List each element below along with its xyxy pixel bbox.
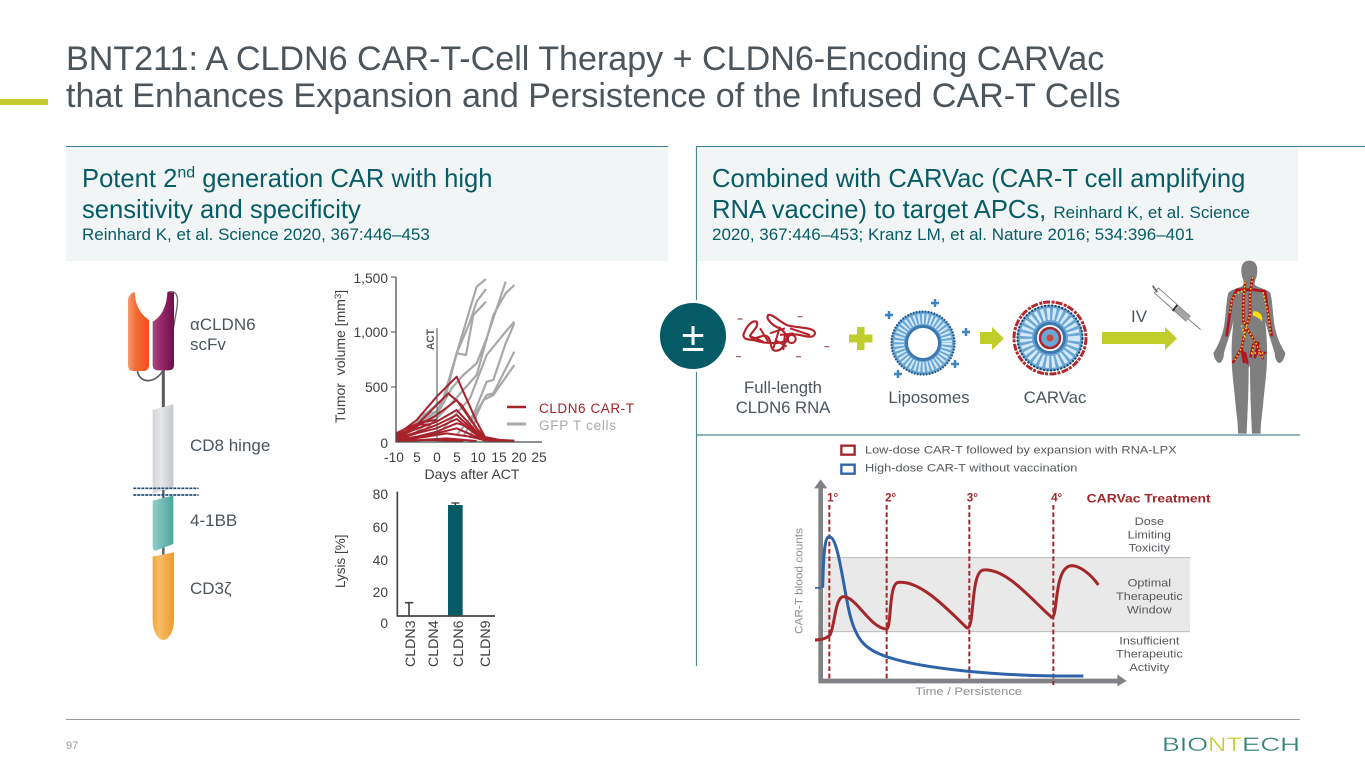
x tick labels: 5	[453, 450, 461, 465]
heading text: CARVac: Combined with CARVac (CAR-T cell amplifying	[712, 165, 1245, 193]
panel: right heading	[696, 146, 1298, 261]
bars and axes	[397, 492, 495, 616]
treatment labels	[827, 492, 1211, 505]
category labels: CLDN3	[403, 620, 419, 667]
heading text: CARVac: 2020, 367:446–453; Kranz LM, et al. Nature 2016; 534:396–401	[712, 225, 1194, 244]
title: that Enhances Expansion and Persistence of the Infused CAR-T Cells	[66, 76, 1120, 114]
header rule extension	[1298, 146, 1365, 147]
title	[66, 40, 1120, 114]
CAR labels: CD8 hinge	[190, 436, 270, 455]
blue curve	[823, 537, 1083, 676]
zone labels: Optimal	[1128, 576, 1171, 589]
zone labels: Toxicity	[1129, 541, 1170, 554]
curves: GFP and CAR-T	[396, 279, 514, 442]
legend text: Low-dose CAR-T followed by expansion with RNA-LPX	[865, 444, 1177, 456]
zone labels: Limiting	[1128, 528, 1171, 541]
logo: BioNTech: BIO	[1162, 735, 1208, 756]
x tick labels: 5	[413, 450, 421, 465]
CAR labels: 4-1BB	[190, 511, 237, 530]
zone labels: Therapeutic	[1116, 590, 1183, 603]
y axis title: Lysis [%]	[333, 534, 348, 588]
y tick labels: 1,500	[353, 271, 388, 286]
label: RNA	[736, 378, 831, 417]
icon: CARVac particle	[1014, 302, 1086, 374]
icon: liposome	[885, 299, 970, 378]
heading text: CARVac: RNA vaccine) to target APCs, Reinhard K, et al. Science	[712, 196, 1250, 224]
page number: 97	[66, 740, 78, 752]
legend text	[865, 444, 1177, 475]
x axis title: Time / Persistence	[915, 686, 1022, 698]
treatment markers	[829, 505, 1053, 685]
icon: human body	[1213, 261, 1285, 434]
optimal window band	[823, 558, 1190, 632]
logo: BioNTech	[1162, 735, 1300, 756]
y tick labels: 0	[380, 616, 388, 631]
category labels: CLDN9	[478, 620, 494, 667]
CAR labels	[190, 315, 270, 598]
heading text: potent CAR: Reinhard K, et al. Science 2020, 367:446–453	[82, 225, 430, 244]
y tick labels: 60	[373, 520, 388, 535]
icon: lime plus	[849, 327, 872, 350]
logo: BioNTech: NT	[1208, 735, 1243, 756]
legend: CLDN6 CAR-T	[539, 401, 634, 416]
chart axes	[391, 277, 542, 442]
x tick labels: 20	[511, 450, 527, 465]
y tick labels: 40	[373, 553, 388, 568]
y tick labels: 0	[380, 436, 388, 451]
y tick labels: 500	[365, 380, 388, 395]
x tick labels: 15	[491, 450, 507, 465]
panel: left heading	[66, 146, 668, 261]
CAR labels: scFv	[190, 335, 226, 354]
zone labels: Therapeutic	[1116, 647, 1183, 660]
footer rule	[66, 718, 1300, 720]
arrow: to CARVac	[980, 327, 1004, 350]
label: RNA: CLDN6 RNA	[736, 398, 831, 417]
y tick labels	[373, 487, 388, 631]
legend: GFP T cells	[539, 418, 616, 433]
heading text: CARVac	[712, 165, 1250, 244]
treatment labels: CARVac Treatment	[1087, 492, 1211, 505]
icon: syringe	[1153, 286, 1201, 330]
zone labels: Activity	[1129, 661, 1169, 674]
y tick labels: 20	[373, 585, 388, 600]
zone labels: Insufficient	[1119, 634, 1180, 647]
red curve	[815, 566, 1098, 640]
axes	[814, 479, 1127, 686]
bar chart: lysis	[333, 487, 495, 667]
treatment labels: 1°	[827, 492, 839, 505]
CAR labels: αCLDN6	[190, 315, 256, 334]
zone labels	[1116, 515, 1183, 674]
label: CARVac: CARVac	[1024, 388, 1086, 407]
y tick labels	[353, 271, 388, 451]
zone labels: Dose	[1135, 515, 1164, 528]
y tick labels: 80	[373, 487, 388, 502]
accent bar	[0, 99, 48, 105]
category labels: CLDN6	[451, 620, 467, 667]
x tick labels: 10	[470, 450, 486, 465]
treatment labels: 4°	[1051, 492, 1063, 505]
arrow: IV	[1102, 327, 1177, 350]
legend text: High-dose CAR-T without vaccination	[865, 463, 1077, 475]
y axis title: CAR-T blood counts	[794, 527, 806, 634]
heading text: potent CAR: Potent 2nd generation CAR with high	[82, 164, 492, 193]
x tick labels: 25	[531, 450, 547, 465]
logo: BioNTech: ECH	[1242, 735, 1300, 756]
icon: RNA	[736, 315, 829, 357]
panel divider lines	[696, 146, 1300, 666]
icon: plus-minus circle	[658, 302, 728, 370]
label: RNA: Full-length	[744, 378, 822, 397]
heading text: potent CAR	[82, 164, 492, 244]
x tick labels: 0	[433, 450, 441, 465]
y axis title: Tumor volume [mm	[332, 299, 348, 423]
category labels: CLDN4	[426, 620, 442, 667]
line chart: tumor volume	[332, 271, 634, 482]
legend	[507, 401, 634, 433]
title: BNT211: A CLDN6 CAR-T-Cell Therapy + CLDN6-Encoding CARVac	[66, 40, 1104, 78]
x axis title: Days after ACT	[425, 466, 520, 482]
y axis title: 3	[333, 294, 344, 299]
heading text: potent CAR: sensitivity and specificity	[82, 196, 361, 224]
label: IV: IV	[1131, 307, 1148, 326]
y axis title: ]	[332, 290, 348, 294]
x tick labels	[384, 450, 547, 465]
category labels	[403, 620, 494, 667]
CAR labels: CD3ζ	[190, 579, 232, 598]
legend swatches	[841, 446, 855, 474]
icon: plus-minus circle: ±	[681, 313, 705, 360]
y tick labels: 1,000	[353, 325, 388, 340]
ACT label: ACT	[425, 329, 437, 350]
chart: CARVac treatment schematic	[794, 444, 1211, 698]
icon: CAR construct	[128, 292, 199, 640]
treatment labels: 3°	[967, 492, 978, 505]
label: liposomes: Liposomes	[888, 388, 970, 407]
treatment labels: 2°	[885, 492, 897, 505]
x tick labels: -10	[384, 450, 404, 465]
zone labels: Window	[1127, 603, 1172, 616]
